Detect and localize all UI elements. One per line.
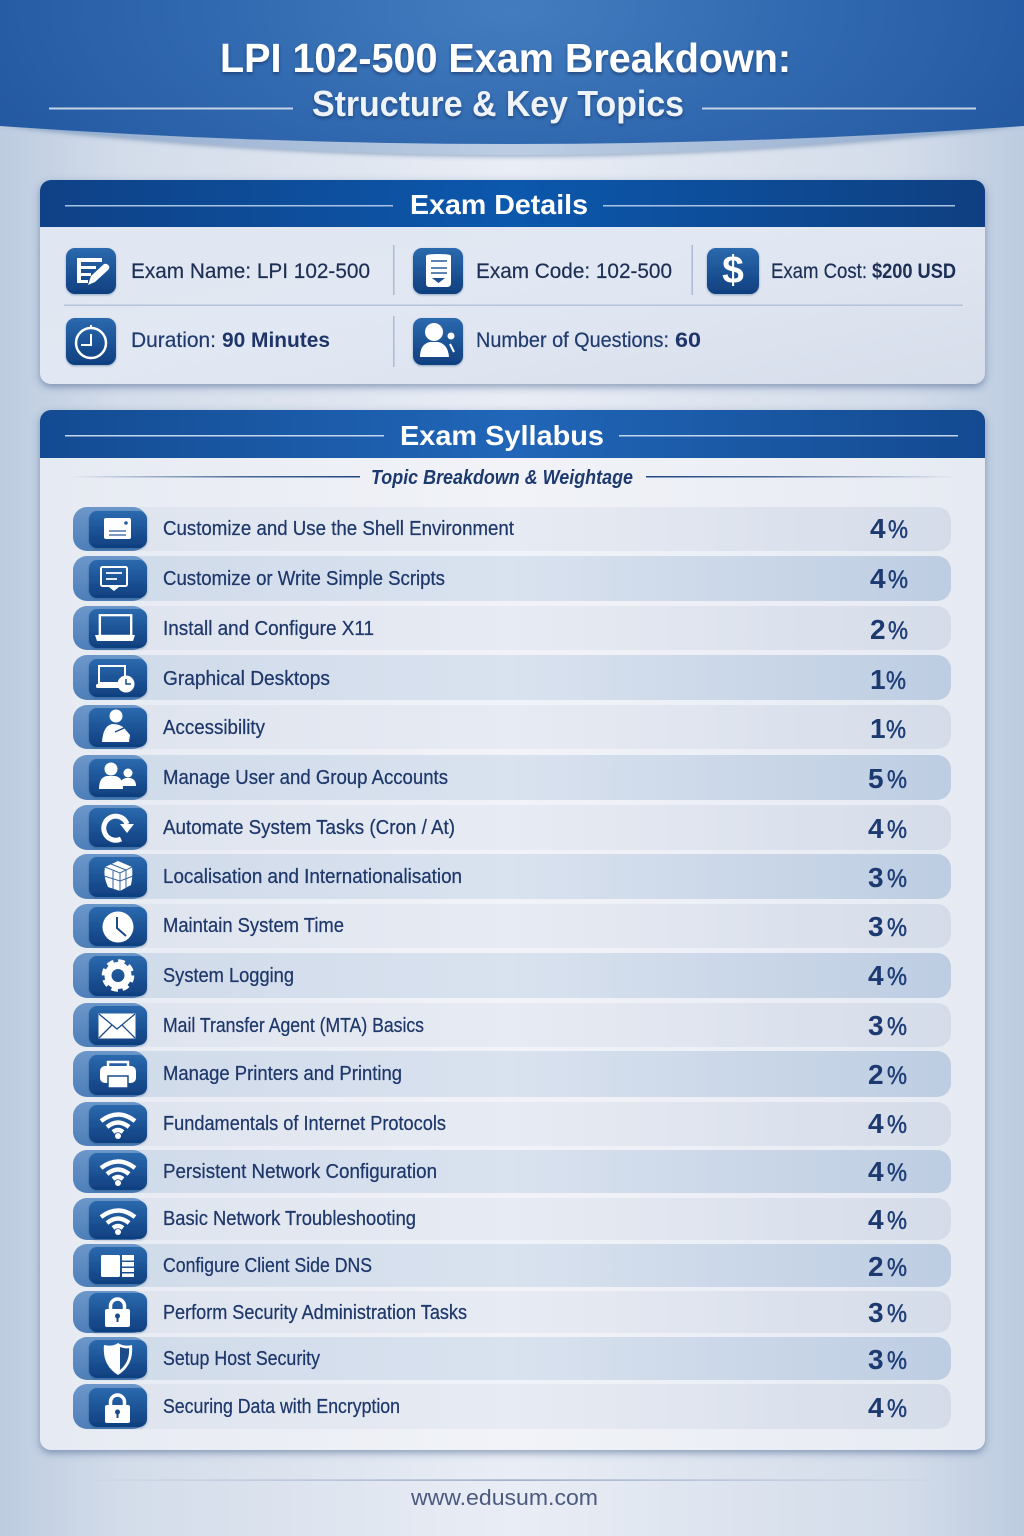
weight [870,713,906,744]
row: network troubleshooting [73,1198,951,1240]
topic: Install and Configure X11 [163,618,374,640]
topic: Configure Client Side DNS [163,1255,372,1277]
topic: Fundamentals of Internet Protocols [163,1113,446,1135]
row: persistent network [73,1150,951,1193]
weight: % [887,914,907,942]
title: LPI 102-500 Exam Breakdown: [220,35,791,81]
weight: 2 [868,1251,884,1282]
weight: 4 [868,1204,884,1235]
detail: number of questions: Number of Questions: [476,329,669,352]
topic: Customize and Use the Shell Environment [163,518,514,540]
weight [868,1156,907,1187]
weight: 4 [870,513,886,544]
topic: Manage User and Group Accounts [163,767,448,789]
icon: padlock [105,1395,130,1423]
row: internet protocols [73,1102,951,1146]
topic: Graphical Desktops [163,668,330,690]
weight [870,614,908,645]
weight: % [887,1347,907,1375]
icon: envelope [98,1014,136,1038]
row: scripts [73,556,951,601]
icon: exam name [66,248,116,294]
weight [868,1010,907,1041]
subheading: Topic Breakdown & Weightage [371,467,633,489]
header banner [0,0,1024,155]
topic: Mail Transfer Agent (MTA) Basics [163,1015,424,1037]
weight: 1 [870,713,886,744]
icon: padlock [105,1299,130,1327]
topic: Manage Printers and Printing [163,1063,402,1085]
icon: person [102,710,130,742]
row: automate tasks [73,805,951,850]
weight: 2 [868,1059,884,1090]
row: client dns [73,1244,951,1287]
weight [868,1204,907,1235]
weight: % [887,1254,907,1282]
weight: % [887,1207,907,1235]
icon: wifi [101,1210,135,1235]
weight: 4 [870,563,886,594]
icon: users [99,762,136,789]
topic: Localisation and Internationalisation [163,866,462,888]
row: system logging [73,953,951,998]
icon: exam code [413,248,463,294]
icon: duration [66,318,116,365]
weight: 2 [870,614,886,645]
weight: % [887,1111,907,1139]
icon: questions [413,318,463,365]
weight: % [887,816,907,844]
weight [868,1251,907,1282]
footer: website: www.edusum.com [410,1485,598,1510]
row: x11 [73,606,951,650]
weight: % [888,617,908,645]
topic: Setup Host Security [163,1348,320,1370]
weight [868,1297,907,1328]
row: localisation [73,854,951,899]
topic: Securing Data with Encryption [163,1396,400,1418]
weight: 4 [868,1108,884,1139]
weight: 3 [868,911,884,942]
topic: Perform Security Administration Tasks [163,1302,467,1324]
detail: exam code: Exam Code: 102-500 [476,260,672,283]
icon: exam cost [707,248,759,294]
row: customize shell [73,507,951,551]
weight [868,1344,907,1375]
icon: cube [104,861,133,891]
weight: % [887,963,907,991]
row: accessibility [73,705,951,749]
weight: % [887,865,907,893]
icon: exam cost: $ [722,249,744,292]
icon: laptop [95,615,135,641]
weight: % [887,1013,907,1041]
icon: printer [100,1062,136,1088]
row: system time [73,904,951,948]
icon: wifi [101,1114,135,1139]
icon: refresh [104,816,134,840]
icon: clock [102,912,134,942]
weight: % [888,516,908,544]
weight: 4 [868,1392,884,1423]
row: host security [73,1337,951,1380]
topic: System Logging [163,965,294,987]
icon: card [104,518,131,539]
heading: exam syllabus: Exam Syllabus [400,420,604,451]
detail: duration value: 90 Minutes [222,329,330,352]
weight [868,813,907,844]
topic: Basic Network Troubleshooting [163,1208,416,1230]
weight: % [887,1300,907,1328]
row: data encryption [73,1384,951,1429]
icon: shield [104,1343,132,1375]
weight: 3 [868,1010,884,1041]
detail: exam name: Exam Name: LPI 102-500 [131,260,370,283]
weight [868,911,907,942]
weight: % [887,766,907,794]
weight [868,1059,907,1090]
weight: 4 [868,960,884,991]
weight: 3 [868,1344,884,1375]
icon: wifi [101,1162,135,1186]
weight [868,763,907,794]
detail: duration: Duration: [131,329,216,352]
weight: % [886,667,906,695]
weight: % [887,1062,907,1090]
weight: 3 [868,862,884,893]
icon: gear [104,962,132,990]
subtitle: Structure & Key Topics [312,83,684,124]
detail: number of questions value: 60 [675,329,701,352]
weight: % [887,1395,907,1423]
weight [868,1392,907,1423]
detail: exam cost: Exam Cost: [771,260,867,283]
row: security administration [73,1291,951,1333]
weight: % [886,716,906,744]
icon: monitor [101,567,127,591]
weight: 1 [870,664,886,695]
weight [870,563,908,594]
weight [868,960,907,991]
row: mail transfer agent [73,1003,951,1047]
weight: 3 [868,1297,884,1328]
weight: % [887,1159,907,1187]
row: printers [73,1051,951,1097]
weight: % [888,566,908,594]
panel: exam details [40,180,985,384]
icon: directory [101,1255,134,1277]
weight: 4 [868,1156,884,1187]
weight [870,513,908,544]
row: graphical desktops [73,655,951,700]
topic: Accessibility [163,717,265,739]
weight: 5 [868,763,884,794]
topic: Persistent Network Configuration [163,1161,437,1183]
topic: Automate System Tasks (Cron / At) [163,817,455,839]
weight [870,664,906,695]
weight [868,1108,907,1139]
icon: desktop with clock [96,666,134,692]
weight: 4 [868,813,884,844]
weight [868,862,907,893]
topic: Customize or Write Simple Scripts [163,568,445,590]
detail: exam cost value: $200 USD [872,260,956,283]
row: user accounts [73,755,951,800]
heading: exam details: Exam Details [410,189,588,220]
topic: Maintain System Time [163,915,344,937]
panel: exam syllabus [40,410,985,1450]
